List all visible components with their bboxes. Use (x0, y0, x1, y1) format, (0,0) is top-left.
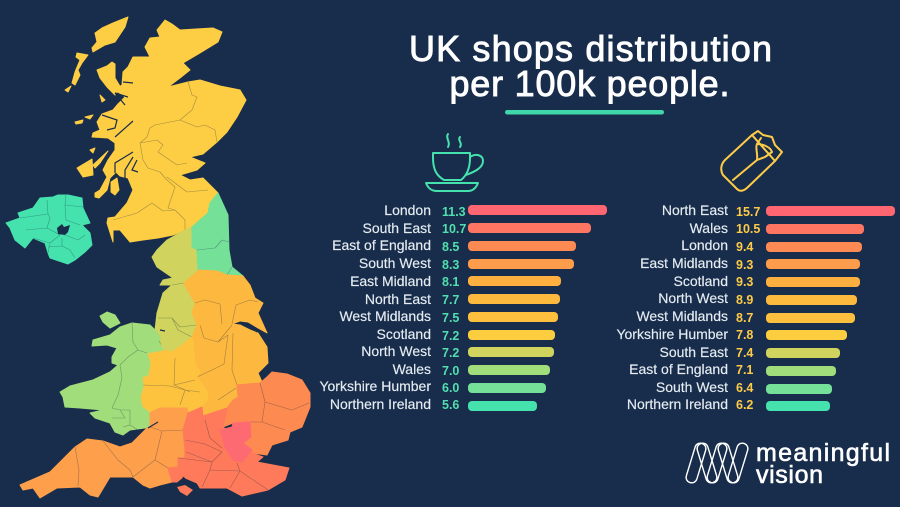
row: East of England 7.1: East of England (629, 361, 728, 377)
row: East Midland 8.1 (350, 273, 561, 289)
region: North East (192, 193, 243, 276)
row: North East 15.7: 15.7 (736, 205, 760, 219)
row: East of England 7.1 (629, 361, 836, 377)
region: Wales (60, 312, 163, 435)
row: North East 7.7 (365, 291, 560, 307)
icon: burrito (721, 131, 782, 191)
row: North East 7.7: North East (365, 291, 431, 307)
row: South East 7.4 (660, 344, 840, 360)
row: South West 8.3: 8.3 (442, 258, 459, 272)
row: Wales 10.5: 10.5 (736, 222, 760, 236)
region: West Midlands (140, 337, 208, 413)
row: North West 8.9: North West (658, 290, 728, 306)
row: Wales 7.0: 7.0 (442, 364, 459, 378)
row: East of England 8.5: 8.5 (442, 240, 459, 254)
detail: Scottish coast and council borders (102, 82, 217, 230)
row: South West 8.3: South West (359, 255, 431, 271)
chart: coffee shops per 100k (319, 202, 607, 412)
region: South West (20, 408, 188, 498)
row: South West 6.4: 6.4 (736, 381, 753, 395)
icon: logo mark (685, 442, 749, 484)
row: Northern Ireland 6.2: 6.2 (736, 398, 753, 412)
row: London 11.3 (384, 202, 607, 219)
row: Scotland 9.3: 9.3 (736, 275, 753, 289)
detail: Humber and Solent inlets (148, 322, 257, 486)
row: North East 15.7 (662, 202, 895, 219)
row: East Midlands 9.3 (640, 255, 860, 272)
row: West Midlands 8.7: 8.7 (736, 311, 753, 325)
row: North West 8.9: 8.9 (736, 293, 753, 307)
map: UK regions (6, 17, 310, 498)
wordmark: meaningful (756, 439, 890, 467)
chart: kebab shops per 100k (616, 202, 895, 412)
row: East Midland 8.1: 8.1 (442, 275, 459, 289)
row: Scotland 9.3: Scotland (674, 273, 728, 289)
row: South East 7.4: South East (660, 344, 728, 360)
row: West Midlands 7.5: West Midlands (339, 308, 431, 324)
row: London 11.3: 11.3 (442, 205, 466, 219)
row: Yorkshire Humber 6.0: Yorkshire Humber (319, 378, 431, 394)
row: South East 7.4: 7.4 (736, 346, 753, 360)
row: London 9.4: 9.4 (736, 240, 753, 254)
wordmark (756, 439, 890, 489)
row: South East 10.7: 10.7 (442, 222, 466, 236)
row: South East 10.7 (362, 220, 591, 236)
row: Wales 10.5 (690, 220, 864, 236)
row: West Midlands 8.7: West Midlands (636, 308, 728, 324)
row: East of England 7.1: 7.1 (736, 363, 753, 377)
row: Wales 7.0 (393, 361, 550, 378)
row: Wales 7.0: Wales (393, 361, 431, 377)
row: West Midlands 7.5: 7.5 (442, 311, 459, 325)
row: East Midlands 9.3: East Midlands (640, 255, 728, 271)
row: East of England 8.5: East of England (332, 237, 431, 253)
row: London 9.4: London (681, 237, 728, 253)
region: Scotland (65, 17, 246, 242)
row: London 11.3: London (384, 202, 431, 218)
row: North West 7.2 (361, 343, 554, 360)
logo: meaningful vision (685, 439, 890, 489)
row: Yorkshire Humber 7.8: Yorkshire Humber (616, 326, 728, 342)
region: Northern Ireland (6, 195, 92, 264)
region: South East (168, 407, 289, 496)
row: London 9.4 (681, 237, 862, 254)
title (409, 28, 772, 104)
row: South West 6.4 (656, 379, 832, 395)
row: Northern Ireland 5.6 (330, 396, 537, 412)
region: London (220, 422, 252, 462)
row: North West 7.2: North West (361, 343, 431, 359)
row: Northern Ireland 6.2: Northern Ireland (627, 396, 728, 412)
row: North West 7.2: 7.2 (442, 346, 459, 360)
row: West Midlands 8.7 (636, 308, 855, 325)
region: Yorkshire and Humber (184, 270, 267, 333)
row: Scotland 7.2 (377, 326, 555, 343)
region: North West (152, 227, 199, 352)
row: South East 10.7: South East (362, 220, 431, 236)
row: Wales 10.5: Wales (690, 220, 728, 236)
row: East Midlands 9.3: 9.3 (736, 258, 753, 272)
row: Yorkshire Humber 7.8: 7.8 (736, 328, 753, 342)
title: per 100k people. (450, 63, 730, 104)
row: East of England 8.5 (332, 237, 576, 254)
row: Yorkshire Humber 7.8 (616, 326, 847, 342)
icon: coffee cup (426, 134, 483, 191)
row: Yorkshire Humber 6.0: 6.0 (442, 381, 459, 395)
wordmark: vision (756, 461, 823, 489)
region: East of England (223, 372, 310, 455)
region: East Midlands (192, 324, 268, 416)
row: Yorkshire Humber 6.0 (319, 378, 546, 395)
row: South West 6.4: South West (656, 379, 728, 395)
row: Northern Ireland 5.6: 5.6 (442, 398, 459, 412)
title: UK shops distribution (409, 28, 772, 69)
row: East Midland 8.1: East Midland (350, 273, 431, 289)
row: North East 7.7: 7.7 (442, 293, 459, 307)
row: Northern Ireland 6.2 (627, 396, 830, 412)
row: West Midlands 7.5 (339, 308, 558, 325)
row: Northern Ireland 5.6: Northern Ireland (330, 396, 431, 412)
row: North East 15.7: North East (662, 202, 728, 218)
row: Scotland 7.2: Scotland (377, 326, 431, 342)
row: North West 8.9 (658, 290, 857, 307)
row: South West 8.3 (359, 255, 574, 272)
title underline (505, 110, 664, 114)
row: Scotland 7.2: 7.2 (442, 329, 459, 343)
row: Scotland 9.3 (674, 273, 860, 289)
